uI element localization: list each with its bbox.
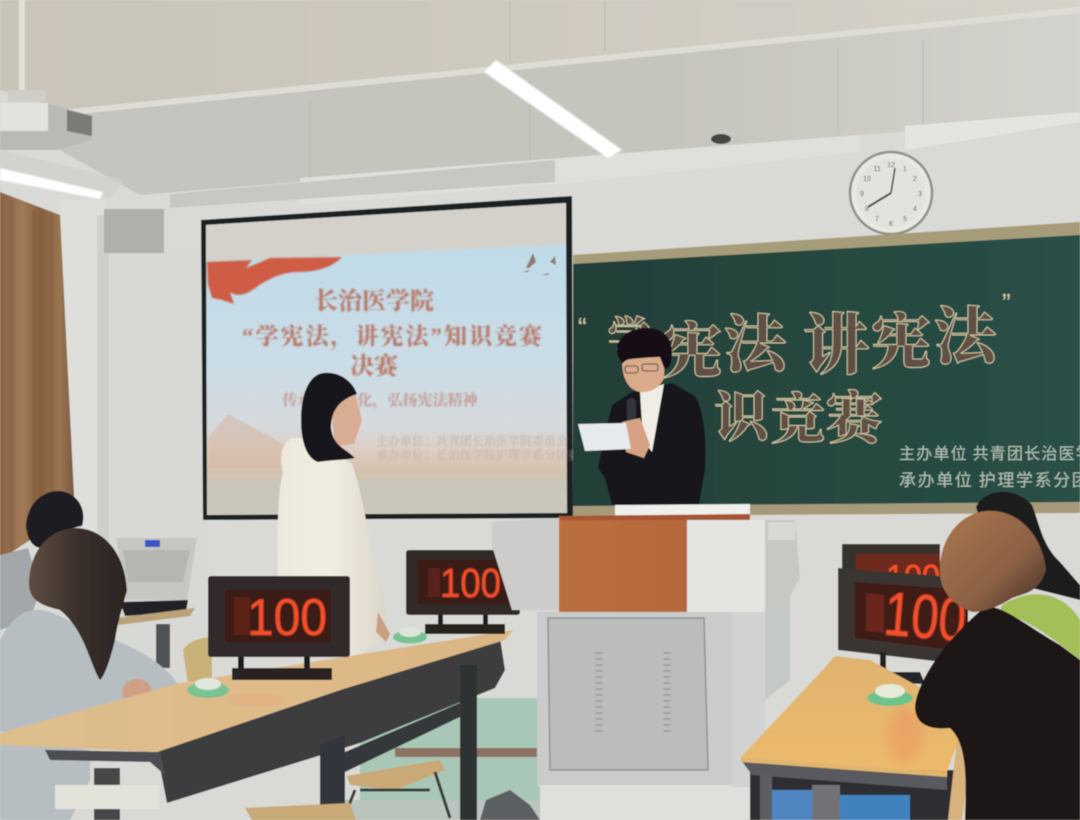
wall clock: 8: [865, 206, 869, 213]
left desk: [0, 630, 513, 820]
left laptop: [116, 538, 197, 616]
green buzzer right: [867, 684, 913, 706]
presenter man: [578, 328, 706, 505]
left desk at back: [115, 608, 195, 625]
rear right scoreboard: 100: [886, 557, 940, 598]
board title: 法: [724, 312, 793, 380]
birds: [522, 253, 556, 275]
scoreboard centre: [406, 550, 520, 634]
jacket: [598, 383, 706, 505]
wall clock: 9: [860, 191, 864, 198]
right scoreboard: [838, 568, 970, 684]
wall clock: 12: [887, 162, 895, 169]
wall clock: 4: [913, 206, 917, 213]
right desk: [741, 656, 975, 820]
slide final: 决赛: [350, 352, 401, 380]
board title: 法: [934, 304, 1003, 372]
scoreboard centre: 100: [440, 560, 501, 606]
projection screen: [201, 196, 580, 520]
board title: 识: [714, 388, 774, 448]
wall clock: 11: [873, 166, 881, 173]
speaker on wall: [104, 209, 164, 253]
wall clock: 5: [903, 216, 907, 223]
wall clock: 3: [918, 191, 922, 198]
chalkboard: “: [578, 312, 587, 342]
wall clock: 2: [913, 176, 917, 183]
board title: 讲: [803, 310, 869, 383]
green buzzer centre: [393, 627, 427, 644]
bag on floor: [480, 790, 540, 820]
board title: 学: [608, 315, 650, 362]
board title: 竞: [771, 389, 825, 450]
right scoreboard: 100: [881, 580, 969, 655]
ceiling lights: [0, 60, 622, 199]
board title: 宪: [662, 318, 722, 385]
wall clock: 7: [875, 216, 879, 223]
back right student: [976, 492, 1080, 600]
lectern: [492, 504, 800, 820]
chalkboard: [573, 222, 1080, 516]
slide organisers: [376, 433, 580, 462]
books under desk: [55, 785, 159, 809]
scoreboard left: [208, 576, 350, 680]
camera dome: [711, 134, 731, 144]
woman in white hoodie: [278, 373, 390, 660]
slide organisers: 承办单位：长治医学院护理学系分团委: [376, 447, 580, 462]
wall clock: [850, 152, 932, 234]
front right student: [915, 511, 1080, 820]
slide organisers: 主办单位：共青团长治医学院委员会: [376, 433, 568, 448]
wall clock: 6: [889, 221, 893, 228]
slide subtitle: “学宪法，讲宪法”知识竞赛: [242, 323, 545, 351]
paper: [578, 423, 631, 451]
wall clock: 1: [903, 166, 907, 173]
desk surface: [0, 630, 513, 752]
hands: [622, 418, 650, 458]
board title: [608, 304, 1003, 451]
desk legs: [460, 665, 477, 820]
chalkboard: ”: [1002, 288, 1011, 318]
scoreboard left: 100: [247, 589, 327, 647]
red ribbon: [207, 257, 342, 304]
stool: [347, 760, 445, 790]
back left student: [0, 491, 83, 630]
front left student: [0, 528, 178, 820]
yellow chair back: [183, 637, 212, 684]
slide title: 长治医学院: [314, 288, 434, 315]
microphone: [627, 398, 636, 426]
board title: 赛: [826, 388, 888, 451]
board title: 宪: [871, 309, 931, 376]
slide building: [208, 414, 285, 468]
wall clock: 10: [863, 176, 871, 183]
floor: [360, 698, 542, 820]
slide slogan: 传承宪法文化，弘扬宪法精神: [282, 391, 478, 410]
green buzzer left: [187, 678, 229, 698]
projector: [0, 0, 92, 150]
curtain: [0, 192, 75, 560]
desk apron: [157, 638, 505, 803]
rear right scoreboard: [842, 544, 940, 598]
